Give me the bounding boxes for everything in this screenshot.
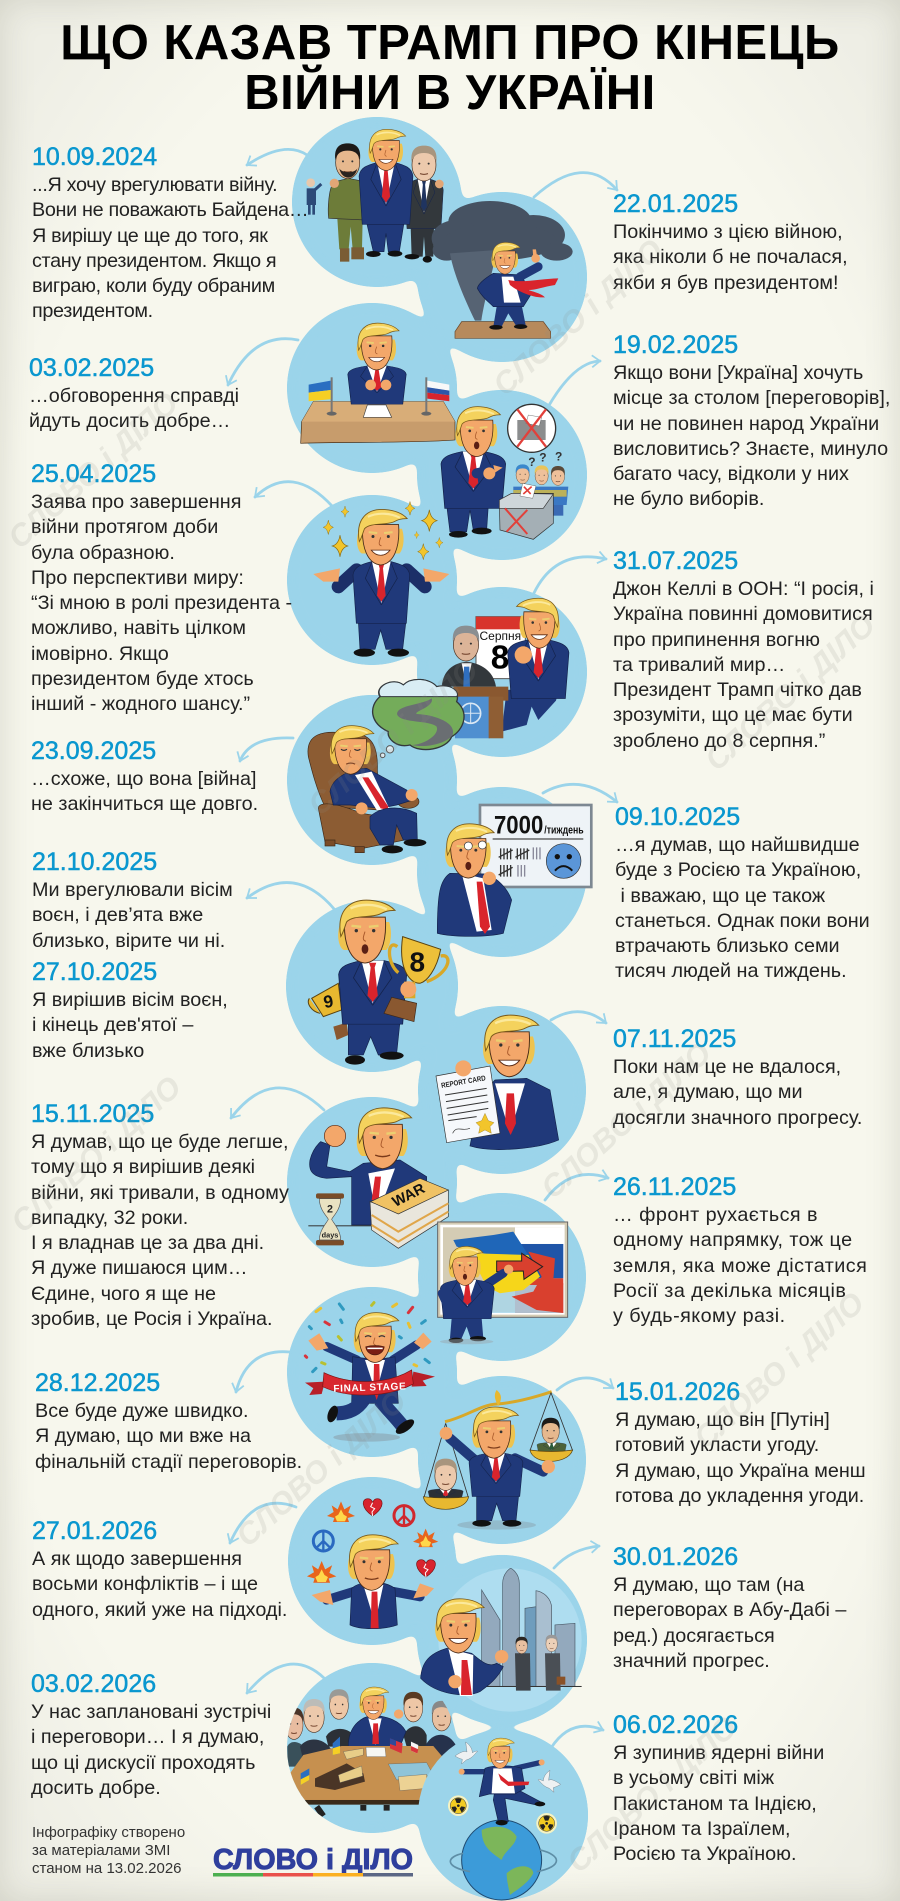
quote: 30.01.2026: 30.01.2026 bbox=[613, 1543, 738, 1571]
doves bbox=[455, 1742, 561, 1792]
paper bbox=[363, 405, 392, 417]
desk bbox=[301, 402, 455, 443]
illustration: Trump with trophies bbox=[308, 900, 448, 1065]
figure: Trump pointing up bbox=[477, 242, 558, 330]
board: 7000 bbox=[494, 811, 543, 839]
quote: 10.09.2024: 10.09.2024 bbox=[32, 143, 157, 171]
watermarks: СЛОВО і ДІЛО bbox=[4, 1069, 188, 1239]
illustration: strong Trump with war folders and hourglass bbox=[308, 1108, 448, 1248]
quote: 31.07.2025: Джон Келлі в ООН: “І росія, і Україна повинні домовитися про припинення вогню та тривалий мир… Президент Трамп чітко дав зрозуміти, що це має бути зроблено до 8 серпня.” bbox=[613, 578, 874, 752]
figure: Biden bbox=[306, 178, 321, 215]
figure: Trump bbox=[359, 129, 413, 257]
armchair bbox=[308, 732, 419, 853]
beam bbox=[445, 1392, 552, 1422]
voters bbox=[513, 464, 568, 516]
figure: Trump thumbs up bbox=[421, 1599, 508, 1696]
illustration: Trump shrugging with sparkles bbox=[313, 502, 449, 657]
question marks: ? bbox=[539, 451, 547, 465]
quote: 15.11.2025: 15.11.2025 bbox=[31, 1100, 154, 1128]
connector arrows bbox=[228, 149, 617, 1748]
illustration: negotiating table bbox=[285, 1687, 457, 1816]
quote: 22.01.2025: 22.01.2025 bbox=[613, 190, 738, 218]
seated people bbox=[285, 1689, 457, 1767]
lobe overlap bbox=[418, 1730, 588, 1900]
quote: 25.04.2025: 25.04.2025 bbox=[31, 460, 156, 488]
figure: Trump scolding bbox=[441, 407, 506, 538]
quote: 30.01.2026: Я думаю, що там (на переговорах в Абу-Дабі – ред.) досягається значний прогрес. bbox=[613, 1574, 846, 1672]
figure: Trump bust bbox=[470, 1015, 559, 1150]
trophy: 8: 8 bbox=[410, 947, 425, 978]
skyscrapers bbox=[482, 1568, 575, 1687]
table line bbox=[308, 1225, 372, 1226]
quote: 25.04.2025: Заява про завершення війни протягом доби була образною. Про перспективи миру: “Зі мною в ролі президента - можливо, навіть цілком імовірно. Якщо президентом буде хтось інший - жодного шансу.” bbox=[31, 491, 292, 715]
figure: Trump bbox=[312, 1535, 434, 1629]
watermarks: СЛОВО і ДІЛО bbox=[229, 1383, 413, 1553]
quote: 03.02.2026: У нас заплановані зустрічі і переговори… І я думаю, що ці дискусії проходять досить добре. bbox=[31, 1701, 271, 1799]
quote: 10.09.2024: ...Я хочу врегулювати війну. Вони не поважають Байдена… Я вирішу це ще до того, як стану президентом. Якщо я виграю, коли буду обраним президентом. bbox=[32, 174, 308, 322]
illustration: shocked Trump and casualty board bbox=[437, 805, 591, 936]
figure: Guterres bbox=[442, 626, 496, 687]
pan: Putin bbox=[423, 1423, 469, 1509]
illustration: legs of jumping Trump bbox=[325, 1400, 416, 1442]
quote: 23.09.2025: 23.09.2025 bbox=[31, 737, 156, 765]
banner: FINAL STAGE bbox=[333, 1381, 407, 1395]
quote: 03.02.2025: …обговорення справді йдуть досить добре… bbox=[29, 385, 239, 432]
platform bbox=[455, 322, 551, 338]
illustration: Abu Dhabi skyline bbox=[421, 1568, 582, 1712]
pan: Zelensky bbox=[530, 1393, 573, 1461]
trophy: 9 bbox=[308, 983, 348, 1040]
figure: Trump bbox=[440, 1407, 555, 1530]
quote: 09.10.2025: 09.10.2025 bbox=[615, 803, 740, 831]
calendar: 8 bbox=[491, 639, 509, 676]
quote: 31.07.2025: 31.07.2025 bbox=[613, 547, 738, 575]
quote: 27.10.2025: Я вирішив вісім воєн, і кінець дев'ятої – вже близько bbox=[32, 989, 228, 1062]
map bbox=[438, 1222, 568, 1317]
report card: REPORT CARD bbox=[440, 1073, 486, 1090]
thought bubble with road bbox=[373, 679, 464, 758]
quote: 23.09.2025: …схоже, що вона [війна] не закінчиться ще довго. bbox=[31, 768, 258, 815]
figure: Trump balancing bbox=[459, 1738, 545, 1825]
quote: 28.12.2025: 28.12.2025 bbox=[35, 1369, 160, 1397]
quote: 15.01.2026: 15.01.2026 bbox=[615, 1378, 740, 1406]
quote: 03.02.2025 bbox=[29, 354, 239, 432]
figure: Trump pointing at calendar bbox=[508, 598, 569, 699]
quote: 27.01.2026: А як щодо завершення восьми конфліктів – і ще одного, який уже на підході. bbox=[32, 1548, 287, 1620]
hourglass: days bbox=[322, 1231, 338, 1240]
hourglass bbox=[316, 1193, 344, 1245]
trophy: 8 bbox=[384, 937, 448, 1022]
footer note: за матеріалами ЗМІ bbox=[32, 1842, 170, 1859]
illustration: Trump with map of Ukraine bbox=[438, 1222, 568, 1344]
title: ВІЙНИ В УКРАЇНІ bbox=[244, 66, 656, 120]
quote: 06.02.2026: 06.02.2026 bbox=[613, 1711, 738, 1739]
quote: 22.01.2025: Покінчимо з цією війною, яка ніколи б не почалася, якби я був президентом! bbox=[613, 221, 848, 294]
footer note bbox=[32, 1824, 185, 1877]
quote: 23.09.2025 bbox=[31, 737, 258, 815]
figure: Trump asleep bbox=[330, 726, 426, 853]
watermarks: СЛОВО і ДІЛО bbox=[687, 1285, 871, 1455]
quote: 19.02.2025: 19.02.2025 bbox=[613, 331, 738, 359]
blue blob timeline bbox=[286, 117, 588, 1900]
figure: Trump shocked bbox=[437, 824, 512, 936]
trophy: 9: 9 bbox=[322, 991, 335, 1012]
figure: Zelensky bbox=[328, 143, 367, 262]
figure: Trump lower body bbox=[502, 687, 560, 732]
figure: Trump shrug bbox=[313, 509, 449, 657]
quote: 27.01.2026: 27.01.2026 bbox=[32, 1517, 157, 1545]
figure: Putin bbox=[405, 146, 444, 263]
illustration: Trump with tornado bbox=[432, 201, 573, 338]
quote: 21.10.2025: Ми врегулювали вісім воєн, і дев’ята вже близько, вірите чи ні. bbox=[32, 879, 233, 952]
quote: 26.11.2025: 26.11.2025 bbox=[613, 1173, 736, 1201]
documents and map bbox=[315, 1747, 433, 1791]
quote: 27.10.2025: 27.10.2025 bbox=[32, 958, 157, 986]
quote: 03.02.2025: 03.02.2025 bbox=[29, 354, 154, 382]
quote: 07.11.2025: 07.11.2025 bbox=[613, 1025, 736, 1053]
illustration: Zelensky, Trump, Putin and tiny Biden bbox=[306, 129, 444, 263]
figure: Trump at table bbox=[348, 1687, 406, 1747]
war folders bbox=[370, 1178, 448, 1248]
calendar: Серпня bbox=[480, 629, 521, 643]
calendar bbox=[476, 617, 525, 679]
title: ЩО КАЗАВ ТРАМП ПРО КІНЕЦЬ bbox=[60, 16, 840, 70]
figure: Trump pointing bbox=[440, 1246, 513, 1344]
quote: 19.02.2025: Якщо вони [Україна] хочуть місце за столом [переговорів], чи не повинен народ України висловитись? Знаєте, минуло багато часу, відколи у них не було виборів. bbox=[613, 362, 890, 510]
quote: 15.01.2026: Я думаю, що він [Путін] готовий укласти угоду. Я думаю, що Україна менш готова до укладення угоди. bbox=[615, 1409, 866, 1507]
logo: Слово і Діло: СЛОВО і ДІЛО bbox=[213, 1844, 413, 1876]
quote: 26.11.2025: … фронт рухається в одному напрямку, тож це земля, яка може дістатися Росії за декілька місяців у будь-якому разі. bbox=[613, 1204, 867, 1327]
question marks bbox=[528, 450, 562, 469]
footer note: Інфографіку створено bbox=[32, 1824, 185, 1841]
footer note: станом на 13.02.2026 bbox=[32, 1860, 182, 1877]
illustration: Trump with report card bbox=[436, 1015, 559, 1150]
watermarks: СЛОВО і ДІЛО bbox=[698, 607, 882, 777]
ballot box bbox=[499, 483, 553, 539]
illustration: Trump at negotiating desk with flags bbox=[301, 323, 455, 443]
watermarks: СЛОВО і ДІЛО bbox=[560, 1709, 744, 1879]
sky bbox=[438, 1568, 582, 1712]
illustration: Trump and elections bbox=[441, 404, 568, 539]
watermarks: СЛОВО і ДІЛО bbox=[1, 385, 185, 555]
illustration: sleeping Trump in armchair bbox=[308, 726, 426, 853]
board: /тиждень bbox=[544, 824, 584, 836]
quote: 06.02.2026: Я зупинив ядерні війни в усьому світі між Пакистаном та Індією, Іраном та Ізраїлем, Росією та Україною. bbox=[613, 1742, 824, 1865]
war folders: WAR bbox=[390, 1181, 428, 1211]
quote: 09.10.2025: …я думав, що найшвидше буде з Росією та Україною, і вважаю, що це також станеться. Однак поки вони втрачають близько семи тисяч людей на тиждень. bbox=[615, 834, 870, 982]
illustration: Trump holding scales with Putin and Zelensky bbox=[423, 1390, 573, 1530]
UN podium bbox=[453, 687, 508, 738]
flag: Ukraine bbox=[309, 377, 337, 416]
question marks: ? bbox=[528, 455, 536, 469]
table bbox=[290, 1746, 457, 1816]
illustration: Trump juggling conflicts bbox=[307, 1499, 438, 1629]
illustration: Trump celebrating final stage bbox=[305, 1303, 435, 1403]
flag: Russia bbox=[421, 377, 449, 416]
globe bbox=[450, 1820, 556, 1900]
watermarks: СЛОВО і ДІЛО bbox=[301, 652, 485, 822]
confetti bbox=[305, 1303, 429, 1372]
figure: Trump jumping bbox=[308, 1313, 432, 1403]
quote: 15.11.2025: Я думав, що це буде легше, тому що я вирішив деякі війни, які тривали, в одному випадку, 32 роки. І я владнав це за два дні. Я дуже пишаюся цим… Єдине, чого я ще не зробив, це Росія і Україна. bbox=[31, 1131, 289, 1330]
nuclear icons bbox=[448, 1795, 557, 1834]
funnel bbox=[450, 250, 497, 321]
watermarks: СЛОВО і ДІЛО bbox=[486, 232, 670, 402]
juggled icons bbox=[307, 1499, 438, 1583]
ballot speech bubble bbox=[508, 404, 556, 452]
title bbox=[60, 16, 840, 120]
illustration: Trump balancing on globe bbox=[418, 1730, 588, 1900]
illustration: Guterres, calendar and Trump bbox=[373, 598, 569, 758]
storm cloud bbox=[432, 201, 573, 261]
board bbox=[480, 805, 591, 887]
quote: 28.12.2025: Все буде дуже швидко. Я думаю, що ми вже на фінальній стадії переговорів. bbox=[35, 1400, 302, 1472]
figure: Trump clapping bbox=[348, 323, 406, 404]
watermarks: СЛОВО і ДІЛО bbox=[534, 1035, 718, 1205]
hourglass: 2 bbox=[327, 1204, 333, 1216]
quote: 03.02.2026: 03.02.2026 bbox=[31, 1670, 156, 1698]
quote: 07.11.2025: Поки нам це не вдалося, але, я думаю, що ми досягли значного прогресу. bbox=[613, 1056, 862, 1128]
question marks: ? bbox=[555, 450, 562, 464]
quote: 21.10.2025: 21.10.2025 bbox=[32, 848, 157, 876]
figure: Trump bbox=[338, 900, 407, 1065]
ground line bbox=[483, 1686, 582, 1687]
table flags bbox=[301, 1737, 418, 1785]
sparkles bbox=[323, 502, 443, 560]
figure: Trump flexing bbox=[310, 1108, 427, 1225]
negotiators bbox=[515, 1635, 565, 1691]
